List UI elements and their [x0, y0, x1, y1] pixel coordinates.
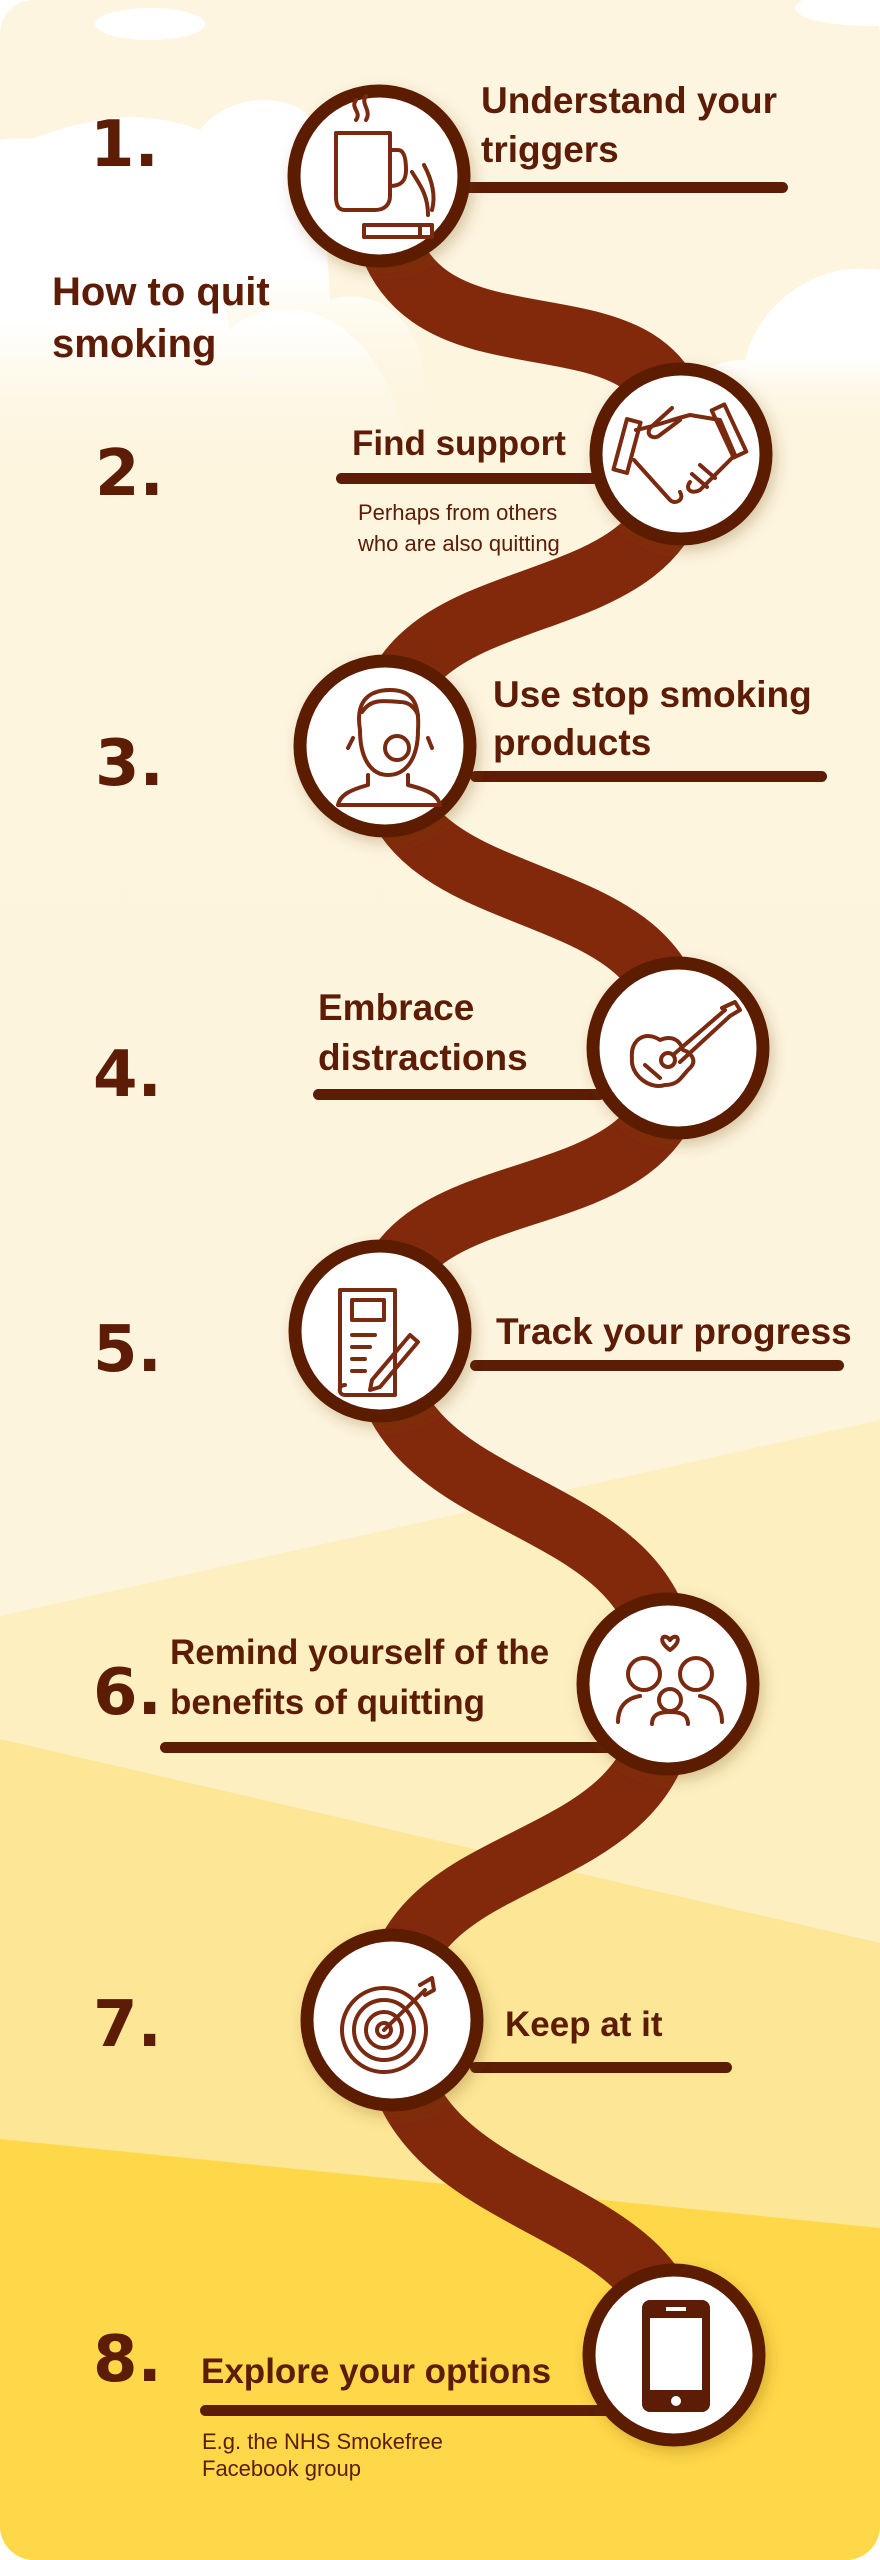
- step 4: distractions: [318, 1037, 528, 1078]
- step 6: 6.: [93, 1656, 162, 1730]
- icon: coffee and cigarette: [294, 91, 464, 261]
- clouds: [0, 0, 880, 398]
- step 2: Find support: [352, 424, 566, 463]
- step 8: 8.: [93, 2323, 162, 2397]
- step 8: [93, 2270, 759, 2481]
- step 4: Embrace: [318, 987, 474, 1028]
- icon: person with gum: [300, 661, 470, 831]
- step 1: [90, 80, 788, 261]
- step 1: 1.: [90, 108, 159, 182]
- icon: phone: [589, 2270, 759, 2440]
- background bands: [0, 1420, 880, 1943]
- step 7: [93, 1935, 732, 2105]
- step 2: 2.: [95, 437, 164, 511]
- step 7: Keep at it: [505, 2005, 663, 2044]
- step 3: 3.: [95, 727, 164, 801]
- path: winding road: [379, 176, 681, 2355]
- step 8: Facebook group: [202, 2456, 361, 2481]
- step 2: [95, 369, 766, 556]
- step 6: [93, 1599, 753, 1769]
- text: smoking: [52, 322, 216, 366]
- step 4: [93, 963, 763, 1133]
- step 2: Perhaps from others: [358, 500, 557, 525]
- step 1: Understand your: [481, 80, 777, 121]
- step 3: products: [493, 722, 651, 763]
- step 8: Explore your options: [201, 2352, 551, 2391]
- step 7: 7.: [93, 1988, 162, 2062]
- icon: notebook and pen: [295, 1246, 465, 1416]
- step 6: benefits of quitting: [170, 1683, 485, 1722]
- icon: guitar: [593, 963, 763, 1133]
- step 5: Track your progress: [496, 1311, 852, 1352]
- step 8: E.g. the NHS Smokefree: [202, 2429, 443, 2454]
- step 5: [93, 1246, 852, 1416]
- step 3: Use stop smoking: [493, 674, 812, 715]
- step 5: 5.: [93, 1313, 162, 1387]
- step 3: [95, 661, 827, 831]
- step 4: 4.: [93, 1038, 162, 1112]
- step 2: who are also quitting: [357, 531, 560, 556]
- icon: family: [583, 1599, 753, 1769]
- step 6: Remind yourself of the: [170, 1633, 549, 1672]
- icon: target: [307, 1935, 477, 2105]
- title: How to quit: [52, 270, 270, 314]
- step 1: triggers: [481, 129, 619, 170]
- icon: handshake: [596, 369, 766, 539]
